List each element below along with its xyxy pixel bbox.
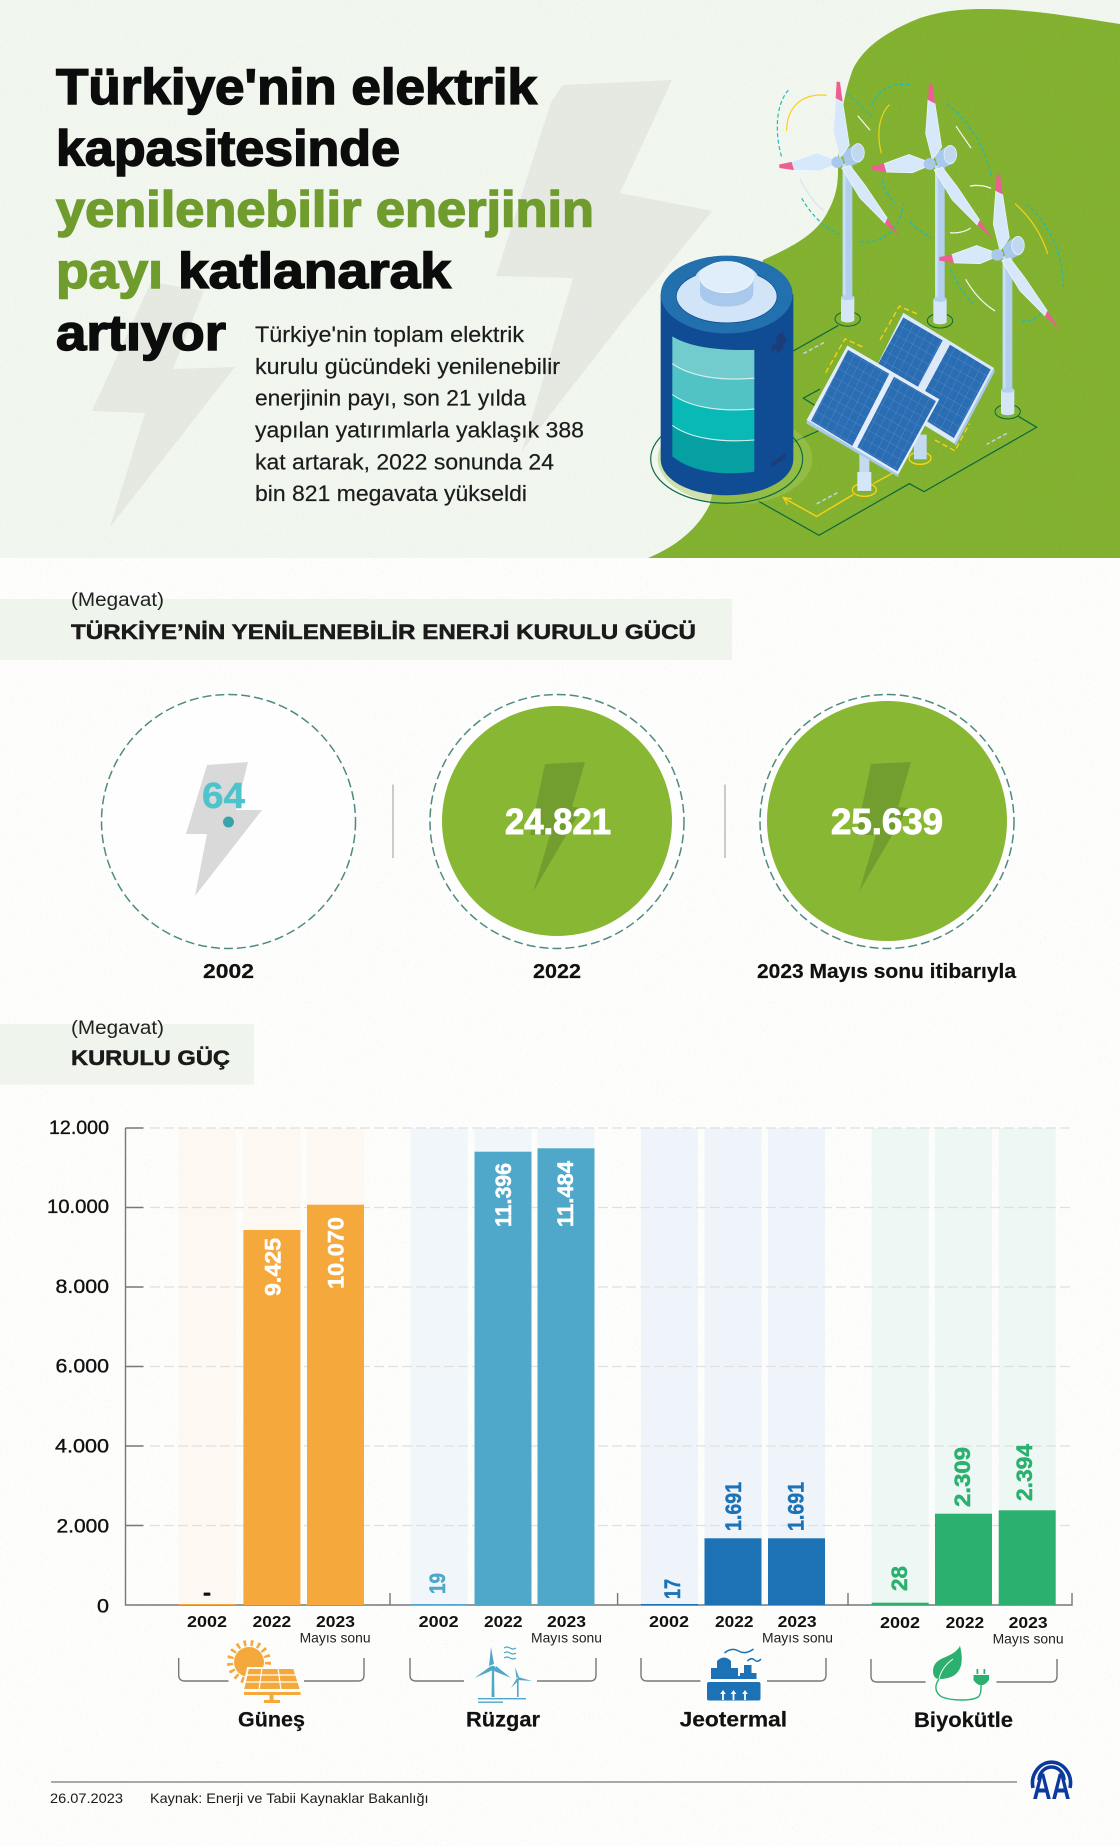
wind bars (411, 1148, 594, 1606)
y axis labels (47, 1118, 109, 1618)
x axis year labels: 2022 (484, 1614, 523, 1631)
biomass bars (872, 1510, 1056, 1605)
bar value labels: - (203, 1580, 211, 1605)
x axis year labels: 2023 (547, 1614, 586, 1631)
intro text block: yapılan yatırımlarla yaklaşık 388 (255, 418, 584, 442)
title: yenilenebilir enerjinin (56, 182, 594, 238)
title: artıyor (56, 305, 226, 361)
section heading: installed capacity (0, 1018, 254, 1084)
bar value labels: 1.691 (721, 1482, 746, 1531)
current direction arrows (802, 343, 1007, 505)
background lightning bolts (92, 80, 712, 527)
circuit wiring (758, 325, 1037, 535)
icon: wind turbines (474, 1647, 532, 1703)
y axis labels: 2.000 (56, 1516, 109, 1538)
bar chart (47, 1118, 1072, 1682)
circle: 2002: 2002 (203, 961, 254, 983)
circle: 2023 May: 25.639 (831, 801, 943, 842)
intro text block: kat artarak, 2022 sonunda 24 (255, 450, 554, 474)
rear solar stand (909, 435, 931, 464)
y axis labels: 4.000 (55, 1436, 109, 1458)
circle: 2023 May: 2023 Mayıs sonu itibarıyla (757, 961, 1017, 983)
rear solar panels (865, 313, 995, 446)
icon: geothermal plant (707, 1649, 761, 1700)
y axis labels: 6.000 (56, 1356, 109, 1378)
bar value labels: 28 (887, 1566, 912, 1591)
x axis year labels: 2022 (253, 1614, 291, 1631)
title: payı (56, 243, 163, 299)
circle: 2022: 2022 (533, 961, 581, 983)
circle: 2023 May (757, 694, 1017, 983)
bar value labels: 1.691 (784, 1482, 808, 1531)
header background panel (0, 0, 1120, 558)
bar value labels: 17 (660, 1579, 685, 1599)
bar value labels (203, 1160, 1037, 1605)
title: kapasitesinde (56, 120, 400, 176)
footer rule (51, 1781, 1017, 1783)
bar value labels: 2.394 (1012, 1443, 1037, 1501)
x axis year labels: 2023 (1009, 1615, 1048, 1632)
green hill shape (648, 9, 1120, 558)
yellow panel wiring (783, 306, 969, 516)
x axis year labels: Mayıs sonu (531, 1630, 602, 1646)
divider (392, 784, 394, 858)
divider (724, 784, 726, 858)
intro text block (255, 322, 584, 506)
icon: leaf and plug (933, 1646, 989, 1700)
footer date: 26.07.2023 (50, 1790, 123, 1806)
section heading: installed renewable capacity: TÜRKİYE’NİN YENİLENEBİLİR ENERJİ KURULU GÜCÜ (71, 621, 696, 644)
x axis year labels: 2022 (715, 1614, 754, 1631)
y axis labels: 12.000 (49, 1118, 109, 1139)
title (56, 59, 594, 361)
circle: 2022: 24.821 (505, 801, 611, 842)
x axis year labels: 2002 (419, 1614, 459, 1631)
x axis year labels: 2002 (880, 1615, 920, 1632)
grid lines (150, 1128, 1072, 1526)
intro text block: enerjinin payı, son 21 yılda (255, 386, 527, 410)
icon: AA logo (1032, 1762, 1070, 1807)
header illustration: battery, turbines, solar panels (651, 81, 1063, 535)
front solar panels (807, 345, 939, 477)
battery plus sign (772, 331, 786, 353)
category labels: Güneş (238, 1709, 305, 1732)
category labels: Biyokütle (914, 1709, 1013, 1732)
battery body (661, 295, 793, 495)
column backgrounds (179, 1128, 1056, 1605)
turbine three (939, 174, 1059, 419)
x axis year labels (187, 1614, 1064, 1646)
circle: 2002 (102, 694, 356, 983)
footer source: Kaynak: Enerji ve Tabii Kaynaklar Bakanlığı (150, 1790, 428, 1806)
bar value labels: 11.396 (491, 1163, 516, 1227)
section heading: installed capacity: (Megavat) (71, 1018, 164, 1039)
geothermal bars (641, 1538, 825, 1606)
intro text block: Türkiye'nin toplam elektrik (255, 322, 525, 347)
turbine two (872, 83, 992, 328)
section heading: installed capacity: KURULU GÜÇ (71, 1047, 230, 1070)
x axis year labels: 2002 (649, 1614, 689, 1631)
motion arcs around turbines (777, 84, 1063, 321)
x axis year labels: Mayıs sonu (762, 1630, 833, 1646)
solar bars (179, 1205, 364, 1605)
circle: 2002: 64 (202, 775, 245, 816)
section heading: installed renewable capacity (0, 590, 732, 660)
x axis year labels: 2022 (946, 1615, 984, 1632)
title: Türkiye'nin elektrik (56, 59, 537, 115)
axes and ticks (126, 1128, 1072, 1605)
section heading: installed renewable capacity: (Megavat) (71, 590, 164, 611)
front solar stand (852, 445, 876, 496)
intro text block: bin 821 megavata yükseldi (255, 481, 527, 506)
y axis labels: 10.000 (47, 1197, 109, 1218)
y axis labels: 0 (97, 1596, 109, 1618)
intro text block: kurulu gücündeki yenilenebilir (255, 354, 560, 379)
turbine one (779, 81, 899, 326)
category labels (238, 1709, 1013, 1732)
battery minus sign (772, 453, 786, 467)
x axis year labels: Mayıs sonu (300, 1630, 371, 1646)
x axis year labels: 2023 (778, 1614, 817, 1631)
icon: sun and solar panel (230, 1643, 301, 1703)
battery top (661, 256, 793, 333)
category labels: Rüzgar (466, 1709, 540, 1732)
battery charge level (672, 336, 754, 473)
bar value labels: 11.484 (553, 1160, 578, 1227)
title: katlanarak (178, 243, 451, 299)
x axis year labels: Mayıs sonu (993, 1630, 1064, 1646)
bar value labels: 10.070 (324, 1217, 348, 1289)
y axis labels: 8.000 (56, 1277, 109, 1298)
bar value labels: 2.309 (950, 1447, 975, 1507)
category labels: Jeotermal (680, 1709, 787, 1732)
x axis year labels: 2023 (316, 1614, 355, 1631)
bar value labels: 19 (425, 1573, 450, 1594)
bar value labels: 9.425 (260, 1238, 286, 1296)
icon: AA logo: AA (1032, 1766, 1070, 1807)
circle: 2022 (430, 694, 684, 983)
x axis year labels: 2002 (187, 1614, 227, 1631)
category brackets (179, 1658, 1057, 1682)
battery ring (651, 413, 812, 504)
